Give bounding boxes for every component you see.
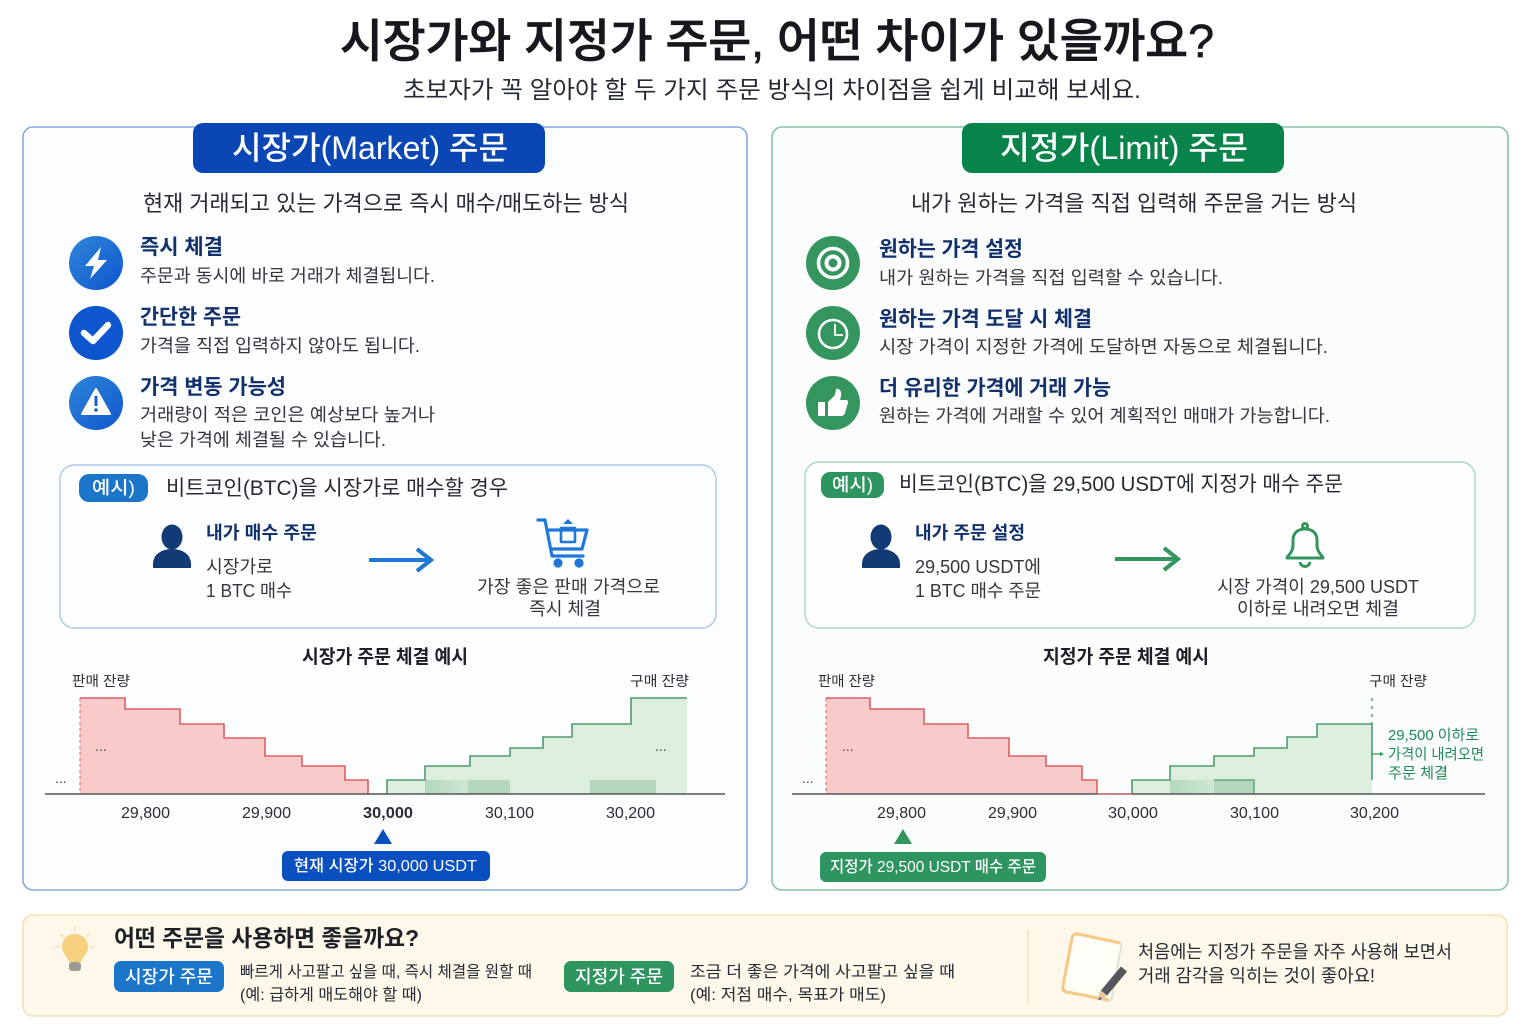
heading: market order: 시장가(Market) 주문 bbox=[232, 130, 508, 166]
buy depth steps bbox=[1132, 724, 1372, 794]
sell depth label: 판매 잔량 bbox=[818, 673, 875, 689]
panel: usage tips bbox=[23, 915, 1507, 1016]
feature: instant fill: 주문과 동시에 바로 거래가 체결됩니다. bbox=[140, 266, 435, 286]
icon: thumbs up bbox=[806, 376, 860, 430]
example badge: 예시) bbox=[832, 475, 873, 495]
feature: simple order bbox=[140, 306, 420, 356]
fill condition annotation: 29,500 이하로 bbox=[1388, 727, 1479, 744]
feature: simple order: 가격을 직접 입력하지 않아도 됩니다. bbox=[140, 336, 420, 356]
example badge bbox=[79, 474, 148, 502]
feature: price variability: 거래량이 적은 코인은 예상보다 높거나 bbox=[140, 405, 435, 425]
limit price marker bbox=[894, 829, 912, 844]
best price fill text bbox=[477, 577, 660, 619]
price axis labels: 29,800 bbox=[877, 805, 926, 822]
limit order tip: 조금 더 좋은 가격에 사고팔고 싶을 때 bbox=[690, 963, 955, 981]
current price callout: 현재 시장가 30,000 USDT bbox=[294, 857, 477, 875]
feature: fill at target price bbox=[879, 308, 1328, 357]
feature: better price bbox=[879, 377, 1330, 426]
icon: target bbox=[806, 236, 860, 290]
feature: simple order: 간단한 주문 bbox=[140, 306, 241, 329]
limit order tag bbox=[564, 961, 674, 992]
price axis labels: 30,200 bbox=[606, 805, 655, 822]
example badge: 예시) bbox=[92, 478, 135, 498]
ellipsis marks bbox=[55, 738, 667, 786]
arrow bbox=[1115, 548, 1178, 570]
buy depth label: 구매 잔량 bbox=[1369, 673, 1427, 689]
ellipsis marks: ... bbox=[842, 738, 854, 754]
current price marker bbox=[374, 829, 392, 844]
limit order description: 내가 원하는 가격을 직접 입력해 주문을 거는 방식 bbox=[911, 191, 1357, 216]
heading: limit order: 지정가(Limit) 주문 bbox=[1000, 130, 1248, 166]
my buy order text: 시장가로 bbox=[206, 557, 273, 577]
price axis labels: 30,000 bbox=[1108, 805, 1158, 822]
feature: set desired price: 내가 원하는 가격을 직접 입력할 수 있습니다. bbox=[879, 268, 1223, 288]
ellipsis marks: ... bbox=[655, 738, 667, 754]
my buy order text: 내가 매수 주문 bbox=[206, 523, 317, 543]
limit example box bbox=[805, 462, 1475, 628]
limit order tag: 지정가 주문 bbox=[575, 967, 663, 987]
feature: fill at target price: 원하는 가격 도달 시 체결 bbox=[879, 308, 1092, 331]
my buy order text bbox=[206, 523, 317, 601]
limit price callout bbox=[820, 852, 1046, 882]
limit order tip: (예: 저점 매수, 목표가 매도) bbox=[690, 986, 886, 1004]
trigger condition text bbox=[1217, 577, 1419, 619]
chart: market order book bbox=[45, 646, 725, 881]
price axis labels: 30,200 bbox=[1350, 805, 1399, 822]
market order tag: 시장가 주문 bbox=[125, 967, 213, 987]
market order tip bbox=[240, 963, 532, 1004]
trigger condition text: 이하로 내려오면 체결 bbox=[1237, 599, 1399, 619]
subtitle: 초보자가 꼭 알아야 할 두 가지 주문 방식의 차이점을 쉽게 비교해 보세요. bbox=[403, 77, 1141, 104]
price axis labels: 30,100 bbox=[485, 805, 534, 822]
feature: price variability: 낮은 가격에 체결될 수 있습니다. bbox=[140, 430, 386, 450]
panel: market order bbox=[23, 123, 747, 890]
chart: limit order book bbox=[792, 646, 1485, 882]
price axis labels: 30,100 bbox=[1230, 805, 1279, 822]
limit order tip bbox=[690, 963, 955, 1004]
sell depth steps bbox=[80, 698, 368, 794]
sell depth steps bbox=[826, 698, 1097, 794]
heading: limit order bbox=[962, 123, 1284, 173]
feature: price variability bbox=[140, 376, 435, 450]
icon: warning bbox=[69, 376, 123, 430]
price axis labels: 29,900 bbox=[988, 805, 1037, 822]
advice text: 처음에는 지정가 주문을 자주 사용해 보면서 bbox=[1138, 942, 1452, 962]
trigger condition text: 시장 가격이 29,500 USDT bbox=[1217, 577, 1419, 597]
title: 시장가와 지정가 주문, 어떤 차이가 있을까요? bbox=[340, 15, 1214, 67]
arrow bbox=[369, 549, 431, 571]
feature: price variability: 가격 변동 가능성 bbox=[140, 376, 286, 399]
limit price callout: 지정가 29,500 USDT 매수 주문 bbox=[830, 858, 1036, 876]
panel: limit order bbox=[772, 123, 1508, 890]
price axis labels bbox=[121, 805, 655, 822]
icon: person bbox=[153, 524, 191, 568]
my order setting text: 29,500 USDT에 bbox=[915, 557, 1041, 577]
icon: person bbox=[862, 524, 900, 568]
feature: better price: 더 유리한 가격에 거래 가능 bbox=[879, 377, 1111, 400]
example heading: 비트코인(BTC)을 시장가로 매수할 경우 bbox=[166, 477, 508, 500]
buy depth steps bbox=[387, 698, 687, 794]
price axis labels bbox=[877, 805, 1399, 822]
icon: note and pencil bbox=[1063, 934, 1124, 1001]
market example box bbox=[60, 465, 716, 628]
example heading: 비트코인(BTC)을 29,500 USDT에 지정가 매수 주문 bbox=[899, 473, 1343, 496]
ellipsis marks: ... bbox=[55, 770, 67, 786]
my order setting text: 내가 주문 설정 bbox=[915, 523, 1025, 543]
best price fill text: 즉시 체결 bbox=[529, 599, 601, 619]
price axis labels: 30,000 bbox=[363, 805, 413, 822]
icon: light bulb bbox=[55, 926, 95, 971]
advice text bbox=[1138, 942, 1452, 986]
ellipsis marks: ... bbox=[802, 770, 814, 786]
feature: fill at target price: 시장 가격이 지정한 가격에 도달하면 자동으로 체결됩니다. bbox=[879, 337, 1328, 357]
price axis labels: 29,900 bbox=[242, 805, 291, 822]
icon: shopping cart bbox=[538, 519, 587, 566]
heading: market order bbox=[193, 123, 545, 173]
fill condition annotation bbox=[1372, 698, 1484, 782]
advice text: 거래 감각을 익히는 것이 좋아요! bbox=[1138, 966, 1375, 986]
ellipsis marks: ... bbox=[95, 738, 107, 754]
market order tip: 빠르게 사고팔고 싶을 때, 즉시 체결을 원할 때 bbox=[240, 963, 532, 981]
my order setting text: 1 BTC 매수 주문 bbox=[915, 581, 1041, 601]
feature: instant fill: 즉시 체결 bbox=[140, 236, 223, 259]
feature: set desired price: 원하는 가격 설정 bbox=[879, 238, 1023, 261]
feature: better price: 원하는 가격에 거래할 수 있어 계획적인 매매가 가능합니다. bbox=[879, 406, 1330, 426]
icon: clock bbox=[806, 306, 860, 360]
buy depth label: 구매 잔량 bbox=[630, 673, 689, 689]
tips heading: 어떤 주문을 사용하면 좋을까요? bbox=[114, 925, 419, 951]
current price callout bbox=[282, 851, 490, 881]
chart title: 시장가 주문 체결 예시 bbox=[302, 646, 468, 668]
price axis labels: 29,800 bbox=[121, 805, 170, 822]
market order tip: (예: 급하게 매도해야 할 때) bbox=[240, 986, 422, 1004]
feature: instant fill bbox=[140, 236, 435, 286]
sell depth label: 판매 잔량 bbox=[72, 673, 130, 689]
icon: lightning bolt bbox=[69, 236, 123, 290]
best price fill text: 가장 좋은 판매 가격으로 bbox=[477, 577, 660, 597]
market order tag bbox=[114, 961, 224, 992]
chart title: 지정가 주문 체결 예시 bbox=[1043, 646, 1209, 668]
market order description: 현재 거래되고 있는 가격으로 즉시 매수/매도하는 방식 bbox=[143, 191, 629, 216]
my order setting text bbox=[915, 523, 1041, 601]
icon: check bbox=[69, 306, 123, 360]
ellipsis marks bbox=[802, 738, 854, 786]
feature: set desired price bbox=[879, 238, 1223, 288]
example badge bbox=[821, 472, 884, 498]
fill condition annotation: 주문 체결 bbox=[1388, 765, 1448, 782]
my buy order text: 1 BTC 매수 bbox=[206, 581, 292, 601]
icon: bell bbox=[1287, 524, 1323, 566]
fill condition annotation: 가격이 내려오면 bbox=[1388, 746, 1484, 763]
